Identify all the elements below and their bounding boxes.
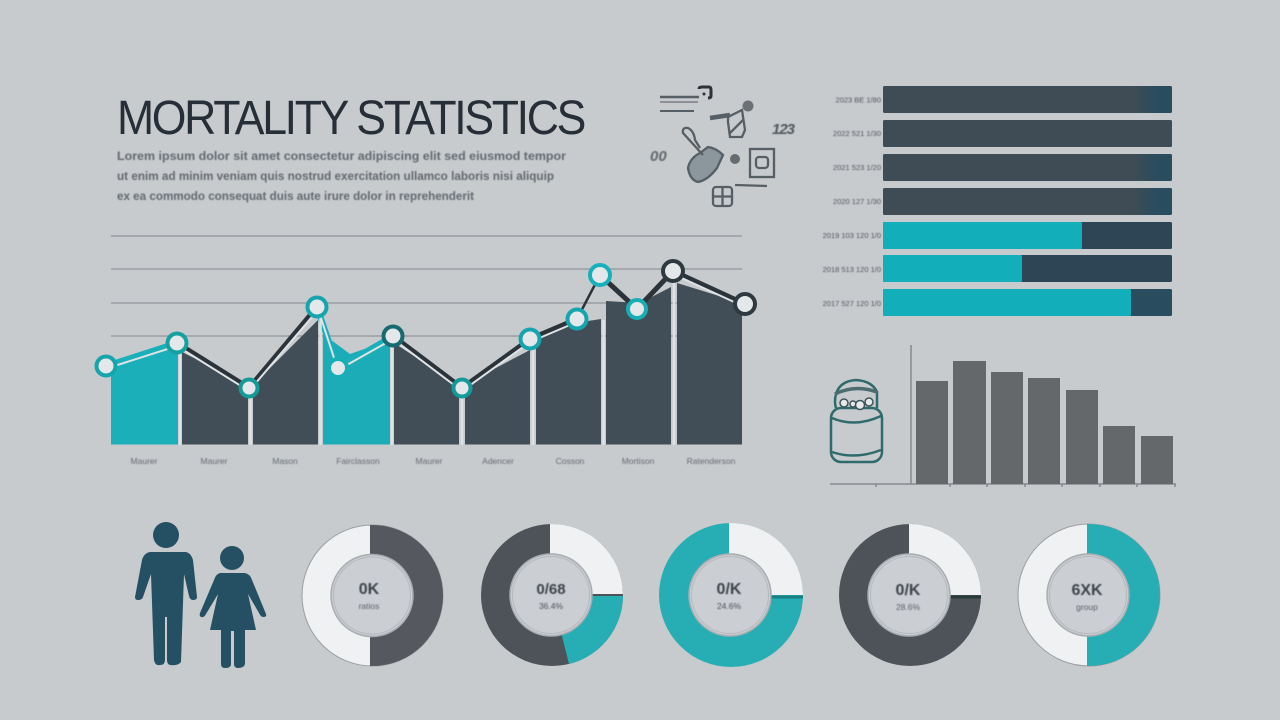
bar labels: 2018 513 120 1/0 [823, 265, 881, 274]
icon: man [135, 522, 197, 665]
x axis labels: Maurer [131, 456, 158, 466]
intro text block [117, 151, 567, 203]
horizontal bar chart [823, 86, 1172, 316]
bar 5 [883, 222, 1172, 249]
x axis labels [131, 456, 736, 466]
donut 1 labels: 0K [359, 581, 380, 598]
bar labels: 2021 523 1/20 [833, 163, 881, 172]
donut 5 labels: 6XK [1071, 582, 1103, 599]
x axis labels: Fairclasson [336, 456, 380, 466]
donut 2 labels [536, 581, 566, 611]
icon: dot [730, 154, 740, 164]
x axis labels: Maurer [416, 456, 443, 466]
bar labels: 2023 BE 1/80 [836, 96, 881, 104]
donut 1 [302, 525, 443, 666]
bar labels: 2020 127 1/30 [833, 197, 881, 206]
donut 1 labels: ratios [359, 601, 379, 611]
donut 4 [839, 524, 981, 666]
area columns [111, 283, 742, 444]
donut 2 labels: 36.4% [539, 601, 563, 611]
data points [96, 261, 755, 396]
bar labels [823, 96, 881, 308]
donut 4 labels: 0/K [896, 582, 921, 599]
x axis labels: Ratenderson [687, 456, 736, 466]
donut 5 labels [1071, 582, 1103, 612]
intro text block: ex ea commodo consequat duis aute irure dolor in reprehenderit [117, 191, 474, 203]
x axis labels: Adencer [482, 456, 514, 466]
icon: pen and dot [710, 100, 754, 137]
icon: text lines [660, 87, 711, 111]
bar 4 [883, 188, 1172, 215]
donut 2 labels: 0/68 [536, 581, 566, 598]
line and area chart [96, 236, 755, 466]
donut 3 labels: 24.6% [717, 601, 741, 611]
donut 4 labels: 28.6% [896, 602, 920, 612]
icon: small number tag: 00 [650, 148, 667, 165]
bars [916, 361, 1173, 484]
icon: clipboard [750, 149, 774, 177]
donut 3 labels [717, 581, 742, 611]
vertical bar chart [830, 345, 1176, 487]
bar 7 [883, 289, 1172, 316]
donut 2 [481, 524, 623, 666]
bar labels: 2022 521 1/30 [833, 129, 881, 138]
icon cluster [650, 87, 796, 206]
icon: number tag: 123 [772, 121, 796, 138]
axes [830, 345, 1176, 487]
icon: woman [200, 546, 266, 668]
donut 4 labels [896, 582, 921, 612]
x axis labels: Cosson [556, 456, 585, 466]
bar 3 [883, 154, 1172, 181]
donut 3 labels: 0/K [717, 581, 742, 598]
icon: capsule with loop [683, 128, 723, 182]
intro text block: Lorem ipsum dolor sit amet consectetur adipiscing elit sed eiusmod tempor [117, 151, 567, 163]
column separators [180, 280, 674, 445]
grid lines [111, 236, 742, 336]
x axis labels: Maurer [201, 456, 228, 466]
title: MORTALITY STATISTICS [117, 92, 584, 145]
trend line [106, 271, 745, 391]
bar labels: 2019 103 120 1/0 [823, 231, 881, 240]
donut 5 labels: group [1076, 602, 1098, 612]
icon: window grid [713, 185, 767, 206]
x axis labels: Mason [272, 456, 298, 466]
donut 5 [1018, 524, 1160, 666]
bar 1 [883, 86, 1172, 113]
donut 1 labels [359, 581, 380, 611]
donut 3 [659, 523, 803, 667]
x axis labels: Mortison [622, 456, 655, 466]
bar labels: 2017 527 120 1/0 [823, 299, 881, 308]
intro text block: ut enim ad minim veniam quis nostrud exercitation ullamco laboris nisi aliquip [117, 171, 554, 183]
bar 2 [883, 120, 1172, 147]
bar 6 [883, 255, 1172, 282]
icon: jar [831, 380, 882, 462]
